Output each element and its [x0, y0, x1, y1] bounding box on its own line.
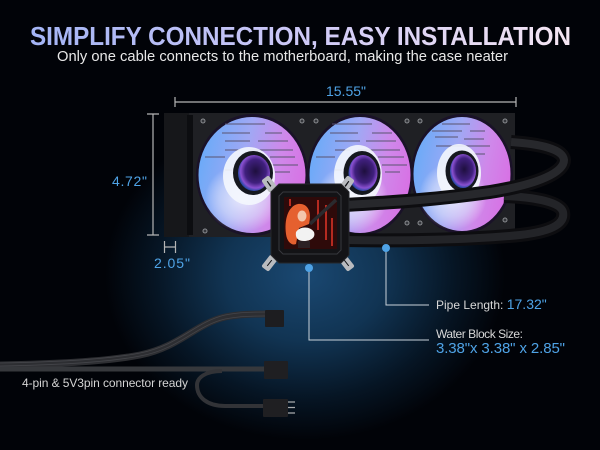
subtitle: Only one cable connects to the motherboard, making the case neater [57, 49, 508, 65]
block body [271, 184, 349, 263]
fan corner screws [201, 119, 507, 233]
label: water block size: 3.38"x 3.38" x 2.85" [436, 340, 565, 357]
radiator frame [164, 113, 515, 237]
label: connector ready: 4-pin & 5V3pin connector ready [22, 376, 188, 390]
4-pin fan cable [0, 312, 266, 366]
coolant pipes [345, 142, 564, 240]
radiator with fans [164, 113, 515, 237]
fan 2 [307, 114, 413, 236]
LCD screen with character [284, 197, 337, 249]
label: pipe length: Pipe Length: 17.32" [436, 296, 547, 312]
3-pin connector [263, 399, 288, 417]
dimension: height 4.72: 4.72" [112, 173, 147, 189]
water block [264, 178, 352, 269]
dimension: depth 2.05 [154, 241, 190, 271]
label: water block size: Water Block Size: [436, 327, 523, 341]
connector pins [288, 402, 295, 413]
label: water block size [436, 327, 565, 357]
leader line: pipe length [382, 244, 429, 305]
mounting ears [264, 178, 352, 269]
5V3pin main cable [0, 366, 266, 372]
dimension: height 4.72 [112, 114, 159, 235]
cables and connectors [0, 310, 295, 417]
5V3pin connector [264, 361, 288, 379]
dimension: width 15.55 [175, 83, 516, 107]
dimension: width 15.55: 15.55" [326, 83, 366, 99]
lower pipe [345, 196, 563, 240]
fan 3 [411, 114, 513, 234]
4-pin connector [265, 310, 284, 327]
fan 1 [196, 114, 308, 236]
dimension: depth 2.05: 2.05" [154, 255, 190, 271]
branch cable [197, 371, 264, 406]
upper pipe [345, 142, 564, 205]
leader line: water block size [305, 264, 429, 340]
title: SIMPLIFY CONNECTION, EASY INSTALLATION [30, 23, 571, 51]
